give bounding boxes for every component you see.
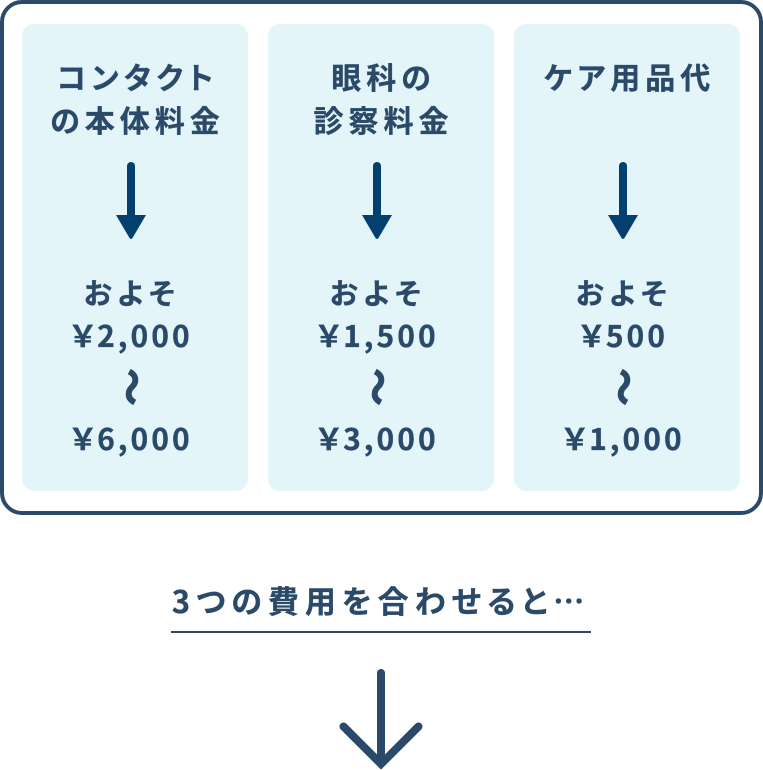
heading: care products: ケア用品代	[544, 54, 715, 98]
price: low: ￥1,500	[317, 312, 439, 356]
wave dash: 〜	[353, 368, 407, 406]
underline	[171, 631, 591, 633]
wave dash: 〜	[107, 368, 161, 406]
arrow: down	[116, 162, 146, 239]
price: low: ￥2,000	[71, 312, 193, 356]
panel: contact lens cost	[22, 24, 248, 491]
heading: ophthalmology: 眼科の	[331, 54, 436, 98]
summary heading: 3つの費用を合わせると…	[172, 577, 590, 622]
price: high: ￥1,000	[563, 415, 685, 459]
wave dash: 〜	[599, 368, 653, 406]
label: approx: およそ	[330, 271, 426, 313]
heading: contact lens body: コンタクト	[57, 54, 218, 98]
arrow: large down	[340, 669, 422, 770]
price: high: ￥3,000	[317, 415, 439, 459]
price: high: ￥6,000	[71, 415, 193, 459]
panel: clinic fee	[268, 24, 494, 491]
label: approx: およそ	[576, 271, 672, 313]
heading line 2: 診察料金	[314, 97, 454, 141]
label: approx: およそ	[84, 271, 180, 313]
panel: care products	[514, 24, 740, 491]
heading line 2: の本体料金	[50, 97, 225, 141]
outer frame	[0, 0, 763, 515]
arrow: down	[362, 162, 392, 239]
price: low: ￥500	[580, 312, 668, 356]
arrow: down	[608, 162, 638, 239]
